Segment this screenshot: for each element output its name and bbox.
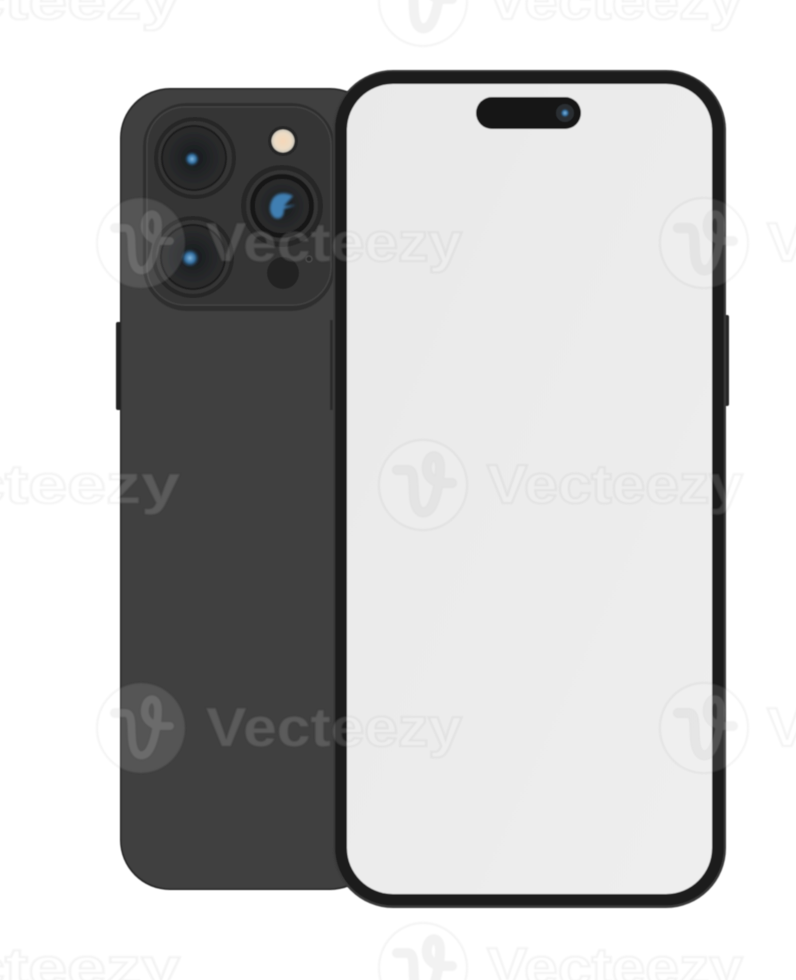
screen [347,84,712,894]
camera island [143,103,335,311]
lidar sensor [267,257,299,289]
phone frame [333,70,726,908]
flash [268,126,298,156]
lens: bottom left [152,216,234,298]
dynamic island [476,97,581,129]
lens: top left [154,117,236,199]
watermarks: Vecteezy [206,696,462,758]
back phone [116,88,380,890]
watermarks: Vecteezy [206,211,462,273]
lens: right [241,165,323,247]
side notches [330,320,333,410]
watermarks: Vecteezy [487,453,743,515]
side button left [116,322,122,410]
microphone [306,256,312,262]
phone body [120,88,380,890]
side button right [724,315,729,406]
front phone [333,70,729,908]
